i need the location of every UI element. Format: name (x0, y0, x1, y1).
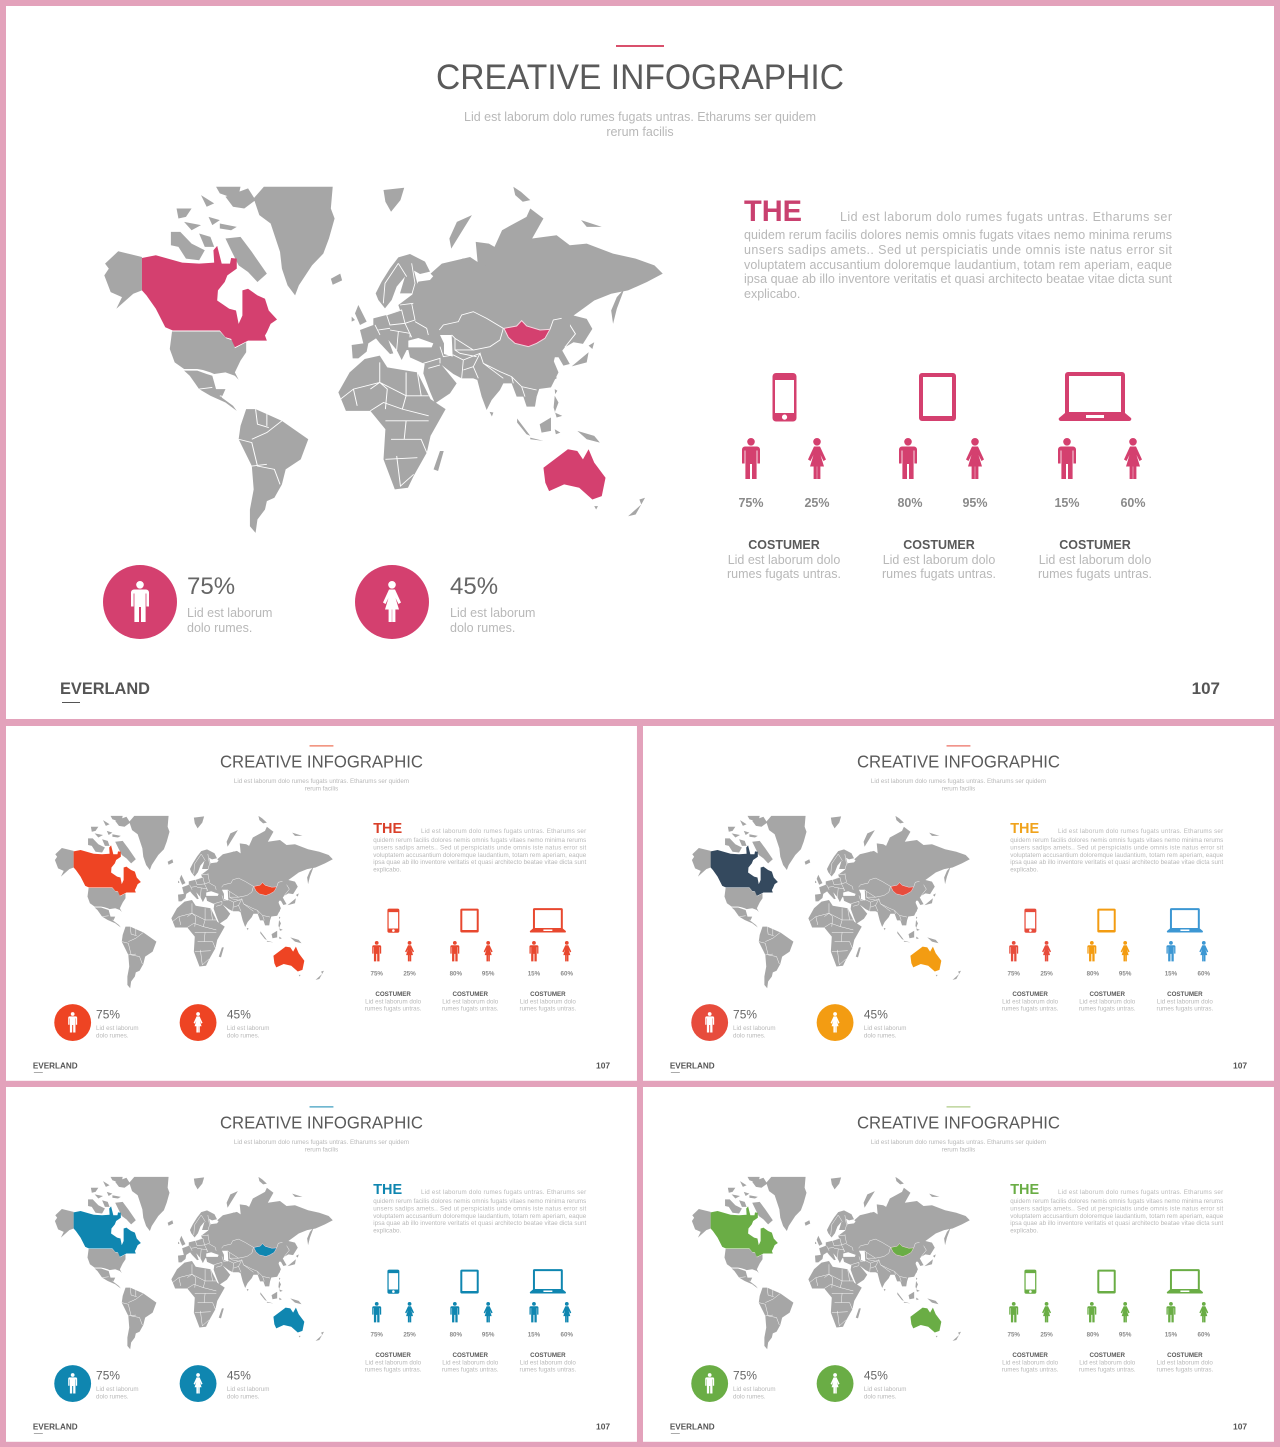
column: laptop: 15% (528, 1331, 541, 1338)
column: tablet: Lid est laborum dolo (883, 553, 995, 567)
subtitle: rerum facilis (305, 786, 338, 793)
paragraph: voluptatem accusantium doloremque laudantium, totam rem aperiam, eaque (373, 852, 587, 859)
paragraph: ipsa quae ab illo inventore veritatis et quasi architecto beatae vitae dicta sunt (373, 859, 586, 866)
column: laptop: 15% (1054, 496, 1080, 510)
panel: blue slide (6, 1087, 637, 1442)
paragraph: ipsa quae ab illo inventore veritatis et quasi architecto beatae vitae dicta sunt (1010, 859, 1223, 866)
stat: women 45%: 45% (227, 1369, 251, 1383)
column: tablet: 80% (450, 1331, 463, 1338)
column: phone: 75% (738, 496, 764, 510)
paragraph: Lid est laborum dolo rumes fugats untras. Etharums ser (421, 828, 586, 835)
paragraph (744, 210, 1173, 301)
stat: men 75%: 75% (187, 573, 235, 600)
column: phone: COSTUMER (1012, 1352, 1048, 1359)
world map (55, 1177, 333, 1349)
stat: men 75%: Lid est laborum (187, 606, 272, 620)
column: laptop: 60% (1120, 496, 1146, 510)
stat: men 75% (691, 1365, 776, 1402)
subtitle: Lid est laborum dolo rumes fugats untras. Etharums ser quidem (234, 778, 409, 785)
stat: women 45% (355, 565, 535, 639)
stat: men 75%: 75% (96, 1008, 120, 1022)
paragraph (373, 1189, 587, 1234)
column: laptop: Lid est laborum dolo (1157, 1360, 1213, 1367)
paragraph: Lid est laborum dolo rumes fugats untras. Etharums ser (1058, 1189, 1223, 1196)
subtitle (871, 778, 1046, 793)
subtitle: rerum facilis (942, 786, 975, 793)
world map (55, 816, 333, 988)
column: laptop: 15% (1165, 970, 1178, 977)
column: tablet: rumes fugats untras. (442, 1006, 499, 1013)
column: tablet: 80% (450, 970, 463, 977)
stat: women 45%: Lid est laborum (227, 1386, 269, 1393)
page number: 107 (596, 1421, 610, 1431)
column: phone: 75% (370, 1331, 383, 1338)
heading: THE: THE (1010, 1181, 1039, 1198)
title: CREATIVE INFOGRAPHIC (220, 751, 423, 771)
page number: 107 (1233, 1060, 1247, 1070)
stat: men 75%: Lid est laborum (96, 1386, 139, 1393)
column: tablet: COSTUMER (1089, 1352, 1126, 1359)
stat: men 75% (54, 1004, 139, 1041)
paragraph: quidem rerum facilis dolores nemis omnis fugats vitaes nemo minima rerums (1010, 837, 1223, 844)
panel: main pink slide (6, 6, 1274, 719)
paragraph: quidem rerum facilis dolores nemis omnis fugats vitaes nemo minima rerums (1010, 1198, 1223, 1205)
column: phone: Lid est laborum dolo (1002, 1360, 1059, 1367)
stat: women 45%: dolo rumes. (227, 1393, 260, 1400)
footer brand: EVERLAND (670, 1421, 715, 1431)
stat: women 45%: 45% (450, 573, 498, 600)
title: CREATIVE INFOGRAPHIC (857, 1112, 1060, 1132)
column: laptop (1157, 908, 1214, 1013)
title: CREATIVE INFOGRAPHIC (220, 1112, 423, 1132)
column: laptop: rumes fugats untras. (1038, 567, 1152, 581)
page number: 107 (596, 1060, 610, 1070)
column: tablet: rumes fugats untras. (1079, 1006, 1136, 1013)
panel: multicolor slide (643, 726, 1274, 1081)
column: phone: COSTUMER (748, 538, 820, 552)
subtitle: rerum facilis (305, 1147, 338, 1154)
subtitle: Lid est laborum dolo rumes fugats untras. Etharums ser quidem (871, 1139, 1046, 1146)
title: CREATIVE INFOGRAPHIC (436, 58, 844, 97)
paragraph (1010, 1189, 1224, 1234)
stat: women 45%: dolo rumes. (227, 1032, 260, 1039)
column: laptop: 60% (561, 1331, 573, 1338)
column: phone: COSTUMER (1012, 991, 1048, 998)
column: phone: Lid est laborum dolo (1002, 999, 1059, 1006)
heading: THE: THE (373, 1181, 402, 1198)
column: laptop: 60% (561, 970, 573, 977)
subtitle (234, 778, 409, 793)
column: phone: Lid est laborum dolo (728, 553, 840, 567)
column: tablet: 80% (1087, 1331, 1100, 1338)
accent rule (947, 1105, 970, 1108)
stat: men 75%: Lid est laborum (733, 1025, 776, 1032)
column: laptop: 60% (1198, 970, 1210, 977)
column: phone: COSTUMER (375, 991, 411, 998)
paragraph (1010, 828, 1224, 873)
paragraph: unsers sadips amets.. Sed ut perspiciatis unde omnis iste natus error sit (1010, 1205, 1223, 1212)
footer brand: EVERLAND (60, 679, 150, 698)
stat: men 75%: 75% (96, 1369, 120, 1383)
stat: women 45%: Lid est laborum (864, 1386, 906, 1393)
subtitle: Lid est laborum dolo rumes fugats untras. Etharums ser quidem (464, 110, 816, 124)
column: laptop: Lid est laborum dolo (520, 1360, 576, 1367)
column: laptop: rumes fugats untras. (520, 1367, 577, 1374)
page number: 107 (1192, 679, 1220, 698)
column: tablet: Lid est laborum dolo (1079, 999, 1136, 1006)
column: phone: 75% (1007, 1331, 1020, 1338)
column: phone (1002, 1270, 1059, 1374)
column: laptop: COSTUMER (1167, 1352, 1203, 1359)
column: phone (365, 1270, 422, 1374)
column: laptop: 60% (1198, 1331, 1210, 1338)
stat: women 45%: dolo rumes. (864, 1393, 897, 1400)
stat: women 45%: Lid est laborum (227, 1025, 269, 1032)
accent rule (310, 744, 333, 747)
paragraph: unsers sadips amets.. Sed ut perspiciatis unde omnis iste natus error sit (1010, 844, 1223, 851)
paragraph (373, 828, 587, 873)
column: phone: rumes fugats untras. (365, 1006, 422, 1013)
stat: women 45%: Lid est laborum (864, 1025, 906, 1032)
paragraph: ipsa quae ab illo inventore veritatis et quasi architecto beatae vitae dicta sunt (744, 272, 1173, 286)
column: tablet (882, 373, 996, 581)
column: tablet: COSTUMER (452, 991, 489, 998)
column: tablet: rumes fugats untras. (442, 1367, 499, 1374)
column: phone: COSTUMER (375, 1352, 411, 1359)
stat: women 45%: 45% (864, 1369, 888, 1383)
stat: women 45% (180, 1004, 269, 1041)
subtitle: Lid est laborum dolo rumes fugats untras. Etharums ser quidem (234, 1139, 409, 1146)
stat: women 45% (817, 1365, 906, 1402)
column: tablet: 80% (1087, 970, 1100, 977)
title: CREATIVE INFOGRAPHIC (857, 751, 1060, 771)
stat: men 75%: Lid est laborum (96, 1025, 139, 1032)
accent rule (947, 744, 970, 747)
subtitle (464, 110, 816, 139)
column: tablet: COSTUMER (1089, 991, 1126, 998)
column: laptop: rumes fugats untras. (1157, 1006, 1214, 1013)
stat: men 75%: dolo rumes. (187, 621, 252, 635)
column: laptop: Lid est laborum dolo (1157, 999, 1213, 1006)
paragraph: quidem rerum facilis dolores nemis omnis fugats vitaes nemo minima rerums (744, 228, 1172, 242)
stat: men 75%: 75% (733, 1369, 757, 1383)
stat: men 75%: dolo rumes. (733, 1032, 766, 1039)
paragraph: voluptatem accusantium doloremque laudantium, totam rem aperiam, eaque (1010, 852, 1224, 859)
paragraph: unsers sadips amets.. Sed ut perspiciatis unde omnis iste natus error sit (373, 844, 586, 851)
column: laptop: COSTUMER (1167, 991, 1203, 998)
column: tablet: 95% (482, 1331, 495, 1338)
column: phone: 75% (1007, 970, 1020, 977)
paragraph: voluptatem accusantium doloremque laudantium, totam rem aperiam, eaque (373, 1213, 587, 1220)
column: laptop (520, 1269, 577, 1374)
stat: women 45% (180, 1365, 269, 1402)
stat: men 75% (103, 565, 272, 639)
column: phone: 25% (1040, 970, 1053, 977)
page number: 107 (1233, 1421, 1247, 1431)
world map (692, 1177, 970, 1349)
column: phone: 25% (403, 970, 416, 977)
column: tablet: COSTUMER (903, 538, 975, 552)
column: tablet: rumes fugats untras. (882, 567, 996, 581)
column: laptop (1038, 372, 1152, 581)
column: phone: 25% (403, 1331, 416, 1338)
paragraph: explicabo. (744, 287, 800, 301)
column: tablet: Lid est laborum dolo (442, 1360, 499, 1367)
panel: green slide (643, 1087, 1274, 1442)
column: tablet: 95% (482, 970, 495, 977)
column: laptop: COSTUMER (530, 991, 566, 998)
stat: women 45%: 45% (227, 1008, 251, 1022)
stat: men 75%: dolo rumes. (96, 1032, 129, 1039)
paragraph: explicabo. (373, 1227, 402, 1234)
stat: men 75%: Lid est laborum (733, 1386, 776, 1393)
column: tablet: COSTUMER (452, 1352, 489, 1359)
column: laptop: COSTUMER (530, 1352, 566, 1359)
stat: women 45%: dolo rumes. (450, 621, 515, 635)
column: laptop: Lid est laborum dolo (520, 999, 576, 1006)
stat: women 45% (817, 1004, 906, 1041)
stat: women 45%: dolo rumes. (864, 1032, 897, 1039)
paragraph: Lid est laborum dolo rumes fugats untras. Etharums ser (840, 210, 1172, 224)
column: tablet: Lid est laborum dolo (1079, 1360, 1136, 1367)
subtitle: Lid est laborum dolo rumes fugats untras. Etharums ser quidem (871, 778, 1046, 785)
column: phone: rumes fugats untras. (365, 1367, 422, 1374)
paragraph: voluptatem accusantium doloremque laudantium, totam rem aperiam, eaque (1010, 1213, 1224, 1220)
paragraph: voluptatem accusantium doloremque laudantium, totam rem aperiam, eaque (744, 258, 1172, 272)
column: phone: 25% (1040, 1331, 1053, 1338)
footer brand: EVERLAND (33, 1060, 78, 1070)
footer brand: EVERLAND (33, 1421, 78, 1431)
column: laptop: rumes fugats untras. (520, 1006, 577, 1013)
paragraph: quidem rerum facilis dolores nemis omnis fugats vitaes nemo minima rerums (373, 1198, 586, 1205)
stat: men 75%: 75% (733, 1008, 757, 1022)
paragraph: explicabo. (1010, 1227, 1039, 1234)
stat: men 75%: dolo rumes. (733, 1393, 766, 1400)
stat: women 45%: 45% (864, 1008, 888, 1022)
column: tablet: Lid est laborum dolo (442, 999, 499, 1006)
column: laptop: rumes fugats untras. (1157, 1367, 1214, 1374)
column: laptop: Lid est laborum dolo (1039, 553, 1151, 567)
column: phone: 75% (370, 970, 383, 977)
stat: women 45%: Lid est laborum (450, 606, 535, 620)
column: tablet: rumes fugats untras. (1079, 1367, 1136, 1374)
column: tablet (442, 1270, 499, 1374)
subtitle: rerum facilis (606, 125, 674, 139)
column: phone (727, 373, 841, 581)
column: tablet (442, 909, 499, 1013)
column: tablet (1079, 909, 1136, 1013)
column: laptop: 15% (1165, 1331, 1178, 1338)
column: phone (365, 909, 422, 1013)
subtitle: rerum facilis (942, 1147, 975, 1154)
paragraph: explicabo. (1010, 866, 1039, 873)
stat: men 75%: dolo rumes. (96, 1393, 129, 1400)
column: tablet: 95% (962, 496, 988, 510)
column: tablet: 95% (1119, 970, 1132, 977)
world map (104, 187, 663, 533)
stat: men 75% (691, 1004, 776, 1041)
world map (692, 816, 970, 988)
panel: red slide (6, 726, 637, 1081)
paragraph: explicabo. (373, 866, 402, 873)
column: tablet: 80% (897, 496, 923, 510)
paragraph: Lid est laborum dolo rumes fugats untras. Etharums ser (1058, 828, 1223, 835)
column: tablet: 95% (1119, 1331, 1132, 1338)
paragraph: ipsa quae ab illo inventore veritatis et quasi architecto beatae vitae dicta sunt (373, 1220, 586, 1227)
stat: men 75% (54, 1365, 139, 1402)
heading: THE: THE (373, 820, 402, 837)
column: laptop: 15% (528, 970, 541, 977)
paragraph: unsers sadips amets.. Sed ut perspiciatis unde omnis iste natus error sit (373, 1205, 586, 1212)
accent rule (310, 1105, 333, 1108)
column: laptop: COSTUMER (1059, 538, 1131, 552)
column: laptop (520, 908, 577, 1013)
paragraph: ipsa quae ab illo inventore veritatis et quasi architecto beatae vitae dicta sunt (1010, 1220, 1223, 1227)
subtitle (234, 1139, 409, 1154)
paragraph: Lid est laborum dolo rumes fugats untras. Etharums ser (421, 1189, 586, 1196)
column: phone: rumes fugats untras. (727, 567, 841, 581)
column: phone: rumes fugats untras. (1002, 1006, 1059, 1013)
subtitle (871, 1139, 1046, 1154)
accent rule (616, 45, 664, 47)
column: phone: 25% (804, 496, 830, 510)
column: laptop (1157, 1269, 1214, 1374)
heading: THE: THE (1010, 820, 1039, 837)
column: phone: rumes fugats untras. (1002, 1367, 1059, 1374)
heading: THE: THE (744, 195, 802, 228)
column: phone (1002, 909, 1059, 1013)
footer brand: EVERLAND (670, 1060, 715, 1070)
column: tablet (1079, 1270, 1136, 1374)
column: phone: Lid est laborum dolo (365, 1360, 422, 1367)
paragraph: unsers sadips amets.. Sed ut perspiciatis unde omnis iste natus error sit (744, 243, 1173, 257)
paragraph: quidem rerum facilis dolores nemis omnis fugats vitaes nemo minima rerums (373, 837, 586, 844)
column: phone: Lid est laborum dolo (365, 999, 422, 1006)
